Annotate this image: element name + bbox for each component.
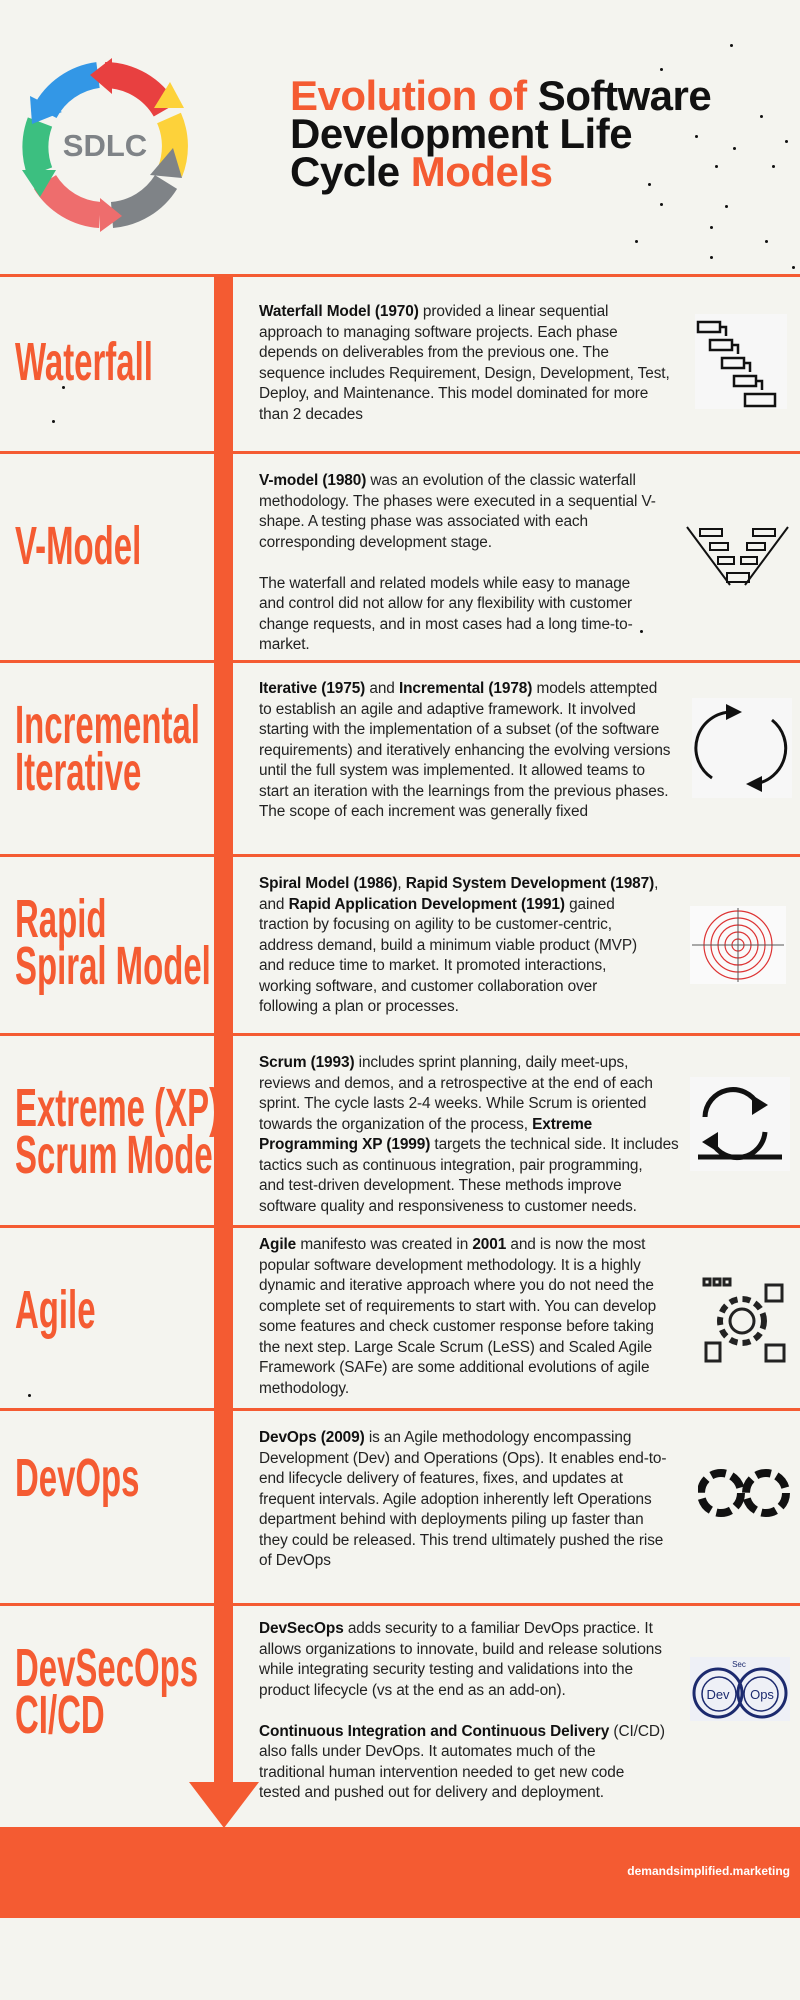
heading: Scrum Model — [15, 1125, 222, 1185]
text: complete set of requirements to start with. You can develop — [259, 1298, 656, 1314]
text: address demand, build a minimum viable product (MVP) — [259, 936, 637, 954]
section: Agile — [15, 1236, 786, 1396]
text: and reduce time to market. It promoted interactions, — [259, 957, 606, 974]
text: The waterfall and related models while easy to manage — [259, 574, 630, 592]
text: V-model (1980) was an evolution of the classic waterfall — [259, 472, 636, 489]
heading: V-Model — [15, 516, 141, 576]
heading: Incremental — [15, 695, 200, 755]
heading: DevOps — [15, 1448, 139, 1508]
text: methodology. The phases were executed in a sequential V- — [259, 492, 656, 510]
text: towards the organization of the process, Extreme — [259, 1116, 592, 1132]
text: starting with the implementation of a subset (of the software — [259, 721, 659, 738]
heading: Extreme (XP) — [15, 1078, 220, 1138]
heading — [15, 1638, 198, 1745]
text: shape. A testing phase was associated with each — [259, 513, 588, 530]
text: and test-driven development. These methods improve — [259, 1177, 622, 1194]
text: sprint. The cycle lasts 2-4 weeks. While Scrum is oriented — [259, 1095, 646, 1112]
heading: Spiral Model — [15, 936, 211, 996]
text: of DevOps — [259, 1552, 331, 1569]
icon: DevSecOps: Sec — [732, 1660, 746, 1669]
title: Evolution of Software — [290, 72, 711, 119]
logo: SDLC cycle — [22, 58, 188, 232]
text: popular software development methodology. It is a highly — [259, 1256, 641, 1274]
section: DevSecOps CI/CD — [15, 1620, 788, 1801]
text: start an iteration with the learnings from the previous phases. — [259, 782, 668, 800]
section: Waterfall — [15, 303, 776, 422]
section dividers — [0, 274, 800, 277]
text — [259, 680, 670, 820]
text: requirements) and iteratively enhancing the evolving versions — [259, 742, 670, 758]
text: and control did not allow for any flexibility with customer — [259, 595, 632, 612]
text: working software, and customer collaboration over — [259, 978, 597, 994]
text: DevOps (2009) is an Agile methodology encompassing — [259, 1429, 631, 1446]
section: Extreme (XP) Scrum Model — [15, 1054, 782, 1214]
icon: waterfall steps — [696, 320, 776, 408]
text: depends on deliverables from the previous one. The — [259, 344, 609, 361]
timeline arrow — [189, 277, 259, 1827]
icon: spiral target — [690, 906, 786, 984]
text: than 2 decades — [259, 406, 363, 422]
heading: DevSecOps — [15, 1638, 198, 1698]
footer band — [0, 1827, 800, 1918]
icon: scrum loop — [698, 1087, 782, 1160]
icon: cycle arrows — [694, 704, 788, 792]
text: to establish an agile and adaptive framework. It involved — [259, 700, 636, 718]
heading — [15, 889, 211, 996]
section: Incremental Iterative — [15, 680, 788, 820]
text: Programming XP (1999) targets the technical side. It includes — [259, 1136, 679, 1153]
heading — [15, 1078, 222, 1185]
text: change requests, and in most cases had a long time-to- — [259, 616, 633, 632]
icon: DevSecOps — [692, 1660, 788, 1718]
text: some features and check customer response before taking — [259, 1318, 654, 1335]
text — [259, 1429, 666, 1569]
text — [259, 303, 670, 422]
text: department behind with deployments piling up faster than — [259, 1511, 644, 1528]
text: they could be released. This trend ultimately pushed the rise — [259, 1532, 663, 1548]
text: allows organizations to innovate, build and release solutions — [259, 1640, 662, 1658]
text: frequent intervals. Agile adoption inherently left Operations — [259, 1490, 652, 1508]
text: end lifecycle delivery of features, fixes, and updates at — [259, 1470, 623, 1487]
footer text: demandsimplified.marketing — [627, 1864, 790, 1878]
icon: DevSecOps: Dev — [706, 1687, 730, 1702]
icon: DevSecOps: Ops — [750, 1687, 774, 1702]
text: The scope of each increment was generally fixed — [259, 803, 588, 820]
title: Cycle Models — [290, 148, 552, 195]
text: Scrum (1993) includes sprint planning, daily meet-ups, — [259, 1054, 628, 1071]
text: Framework (SAFe) are some additional evolutions of agile — [259, 1359, 649, 1376]
text: also falls under DevOps. It automates much of the — [259, 1743, 595, 1760]
text: following a plan or processes. — [259, 998, 459, 1015]
text: until the full system was implemented. It allowed teams to — [259, 762, 645, 779]
text: and Rapid Application Development (1991) gained — [259, 896, 615, 912]
text: the next step. Large Scale Scrum (LeSS) and Scaled Agile — [259, 1338, 652, 1356]
text — [259, 1236, 656, 1396]
section: V-Model — [15, 472, 789, 653]
text: approach to managing software projects. Each phase — [259, 324, 618, 340]
text — [259, 1620, 665, 1801]
logo: SDLC cycle: SDLC — [63, 128, 147, 163]
text — [259, 1054, 679, 1214]
section: DevOps — [15, 1429, 790, 1569]
text: sequence includes Requirement, Design, Development, Test, — [259, 364, 670, 382]
heading: Waterfall — [15, 332, 153, 392]
text: market. — [259, 636, 310, 653]
heading: Iterative — [15, 742, 141, 802]
heading — [15, 695, 200, 802]
title: Development Life — [290, 110, 632, 157]
text — [259, 875, 658, 1015]
text: Agile manifesto was created in 2001 and is now the most — [259, 1236, 645, 1253]
text: Deploy, and Maintenance. This model dominated for more — [259, 385, 648, 402]
text: Development (Dev) and Operations (Ops). It enables end-to- — [259, 1450, 666, 1466]
text: DevSecOps adds security to a familiar DevOps practice. It — [259, 1620, 653, 1637]
icon: infinity dashed — [698, 1469, 790, 1517]
heading: Rapid — [15, 889, 107, 949]
text: reviews and demos, and a retrospective at the end of each — [259, 1074, 653, 1092]
text: methodology. — [259, 1380, 349, 1396]
text — [259, 472, 656, 653]
text: Iterative (1975) and Incremental (1978) models attempted — [259, 680, 657, 697]
text: Waterfall Model (1970) provided a linear sequential — [259, 303, 608, 320]
icon: agile gear — [702, 1278, 786, 1362]
text: product lifecycle (vs at the end as an add-on). — [259, 1682, 566, 1698]
text: software quality and responsiveness to customer needs. — [259, 1198, 637, 1214]
text: traction by focusing on agility to be customer-centric, — [259, 916, 612, 933]
heading: CI/CD — [15, 1685, 105, 1745]
title — [290, 72, 711, 195]
section: Rapid Spiral Model — [15, 875, 786, 1015]
text: dynamic and iterative approach where you do not need the — [259, 1277, 654, 1294]
text: traditional human intervention needed to get new code — [259, 1764, 624, 1780]
text: Spiral Model (1986), Rapid System Development (1987), — [259, 875, 658, 892]
text: tested and pushed out for delivery and deployment. — [259, 1784, 604, 1801]
text: tactics such as continuous integration, pair programming, — [259, 1156, 643, 1174]
text: while integrating security testing and validations into the — [259, 1661, 633, 1678]
heading: Agile — [15, 1280, 96, 1340]
icon: V diagram — [686, 526, 789, 586]
text: Continuous Integration and Continuous Delivery (CI/CD) — [259, 1722, 665, 1740]
text: corresponding development stage. — [259, 534, 492, 550]
